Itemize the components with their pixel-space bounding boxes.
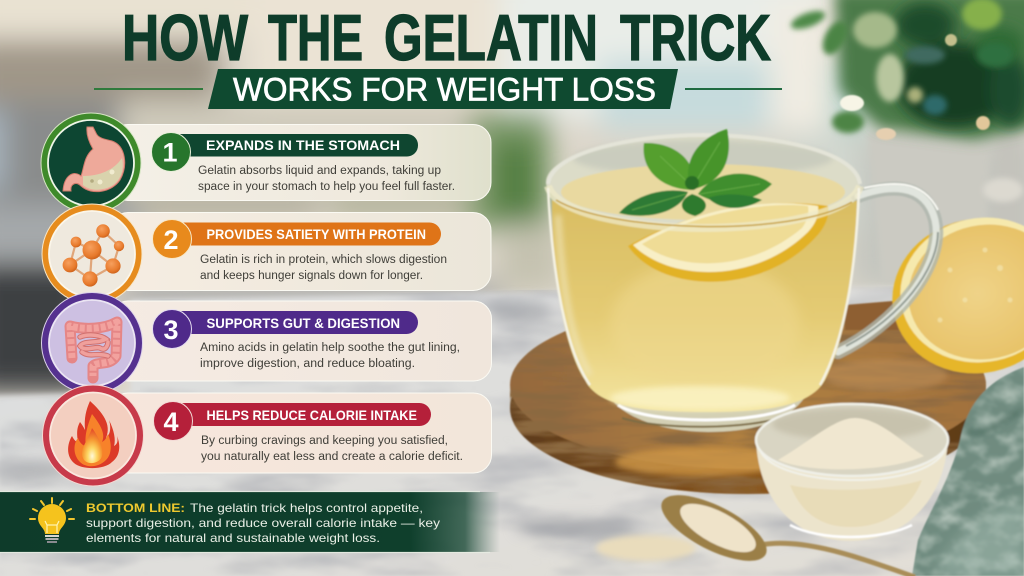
photo: mug, board and ingredients	[500, 129, 1024, 576]
banner text: The gelatin trick helps control appetite,	[190, 501, 423, 515]
body text 4: you naturally eat less and create a calorie deficit.	[201, 451, 463, 463]
number badge 4	[154, 402, 192, 440]
banner text: BOTTOM LINE:	[86, 501, 185, 515]
wooden board	[509, 300, 987, 495]
heading pill 3: SUPPORTS GUT & DIGESTION	[206, 315, 400, 331]
number badge 3: 3	[163, 315, 179, 345]
body text 3: improve digestion, and reduce bloating.	[200, 358, 415, 370]
glass rim	[548, 135, 860, 184]
panel: provides satiety with protein	[42, 204, 491, 304]
icon: intestines	[42, 292, 142, 394]
body text 3	[200, 342, 460, 370]
upper glass interior	[546, 136, 860, 228]
body text 1	[198, 165, 455, 193]
subtitle banner: WORKS FOR WEIGHT LOSS	[233, 72, 656, 108]
icon: flame	[42, 385, 144, 486]
body text 2	[200, 254, 447, 282]
panel: helps reduce calorie intake	[42, 385, 492, 486]
subtitle rule right	[685, 88, 782, 90]
subtitle rule left	[94, 88, 203, 90]
lemon half	[878, 203, 1024, 389]
glass bowl of gelatin powder	[755, 403, 949, 541]
body text 1: Gelatin absorbs liquid and expands, taking up	[198, 165, 441, 177]
panel: expands in the stomach	[41, 113, 491, 213]
mug handle	[838, 184, 938, 352]
heading pill 1	[170, 134, 418, 156]
body text 2: and keeps hunger signals down for longer.	[200, 270, 423, 282]
body text 4: By curbing cravings and keeping you satisfied,	[201, 435, 448, 447]
glass mug	[546, 129, 938, 432]
number badge 2: 2	[163, 225, 179, 255]
body text 2: Gelatin is rich in protein, which slows digestion	[200, 254, 447, 266]
banner edges	[0, 492, 490, 552]
title: HOW	[122, 1, 249, 74]
mint sprig	[619, 129, 772, 216]
banner text	[86, 501, 440, 545]
liquid body	[552, 200, 857, 412]
number badge 1: 1	[162, 138, 178, 168]
number badge 2	[152, 220, 192, 258]
mug base	[606, 392, 808, 432]
title: TRICK	[620, 1, 771, 74]
banner text: support digestion, and reduce overall calorie intake — key	[86, 516, 440, 530]
lemon slice	[628, 203, 828, 282]
body text 3: Amino acids in gelatin help soothe the gut lining,	[200, 342, 460, 354]
gold spoon with powder	[652, 482, 915, 576]
card 1 background	[110, 124, 491, 200]
card 4 background	[110, 393, 492, 473]
body text 1: space in your stomach to help you feel full faster.	[198, 181, 455, 193]
banner text: elements for natural and sustainable weight loss.	[86, 531, 380, 545]
card 3 background	[110, 301, 492, 381]
plant and pot	[789, 0, 1024, 282]
bottom line banner	[0, 492, 500, 552]
heading pill 1: EXPANDS IN THE STOMACH	[206, 137, 400, 153]
heading pill 4	[173, 403, 431, 426]
icon: lightbulb	[30, 498, 74, 543]
heading pill 4: HELPS REDUCE CALORIE INTAKE	[206, 407, 417, 423]
panel: supports gut and digestion	[42, 292, 492, 394]
icon: molecule	[42, 204, 142, 304]
number badge 4: 4	[163, 407, 179, 437]
towel	[905, 360, 1024, 576]
title: GELATIN	[384, 1, 598, 74]
heading pill 2	[172, 222, 441, 246]
number badge 1	[152, 132, 190, 172]
spilled powder	[596, 535, 696, 561]
icon: stomach	[41, 113, 141, 213]
title	[122, 1, 771, 74]
title: THE	[268, 1, 363, 74]
banner background	[0, 492, 500, 552]
card 2 background	[110, 212, 491, 290]
heading pill 2: PROVIDES SATIETY WITH PROTEIN	[206, 226, 426, 242]
heading pill 3	[172, 311, 418, 334]
marble counter	[0, 286, 1024, 576]
number badge 3	[152, 310, 192, 348]
body text 4	[201, 435, 463, 463]
